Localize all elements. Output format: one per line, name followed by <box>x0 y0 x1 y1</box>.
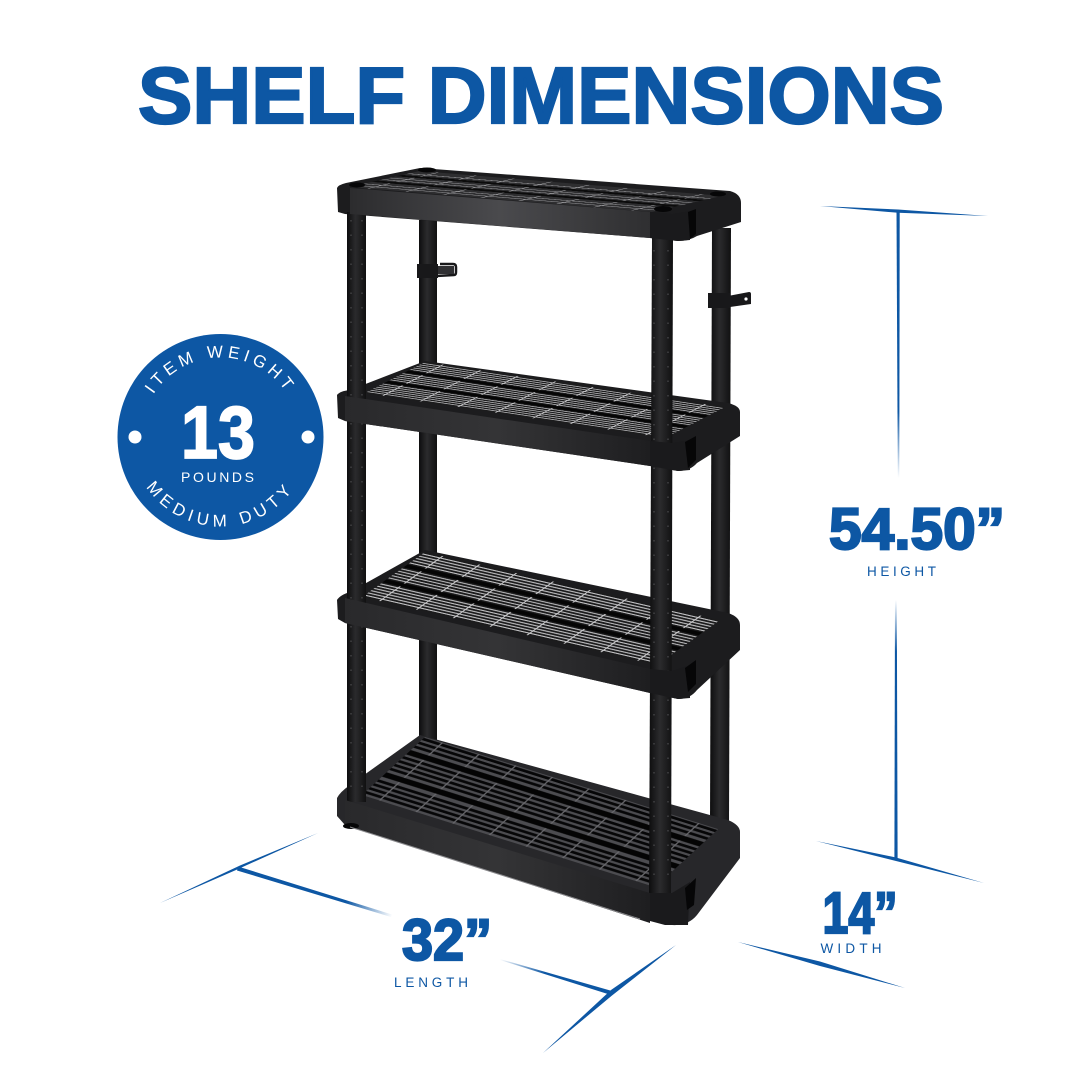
shelf 3 front face <box>345 598 650 693</box>
width value: 14” <box>822 881 898 946</box>
shelf 4 front face <box>345 800 650 923</box>
height dimension line <box>816 206 988 883</box>
title: SHELF DIMENSIONS <box>138 51 944 140</box>
shelf 2 body <box>337 361 740 471</box>
length dimension lines <box>160 833 676 1053</box>
shelf 3 body <box>337 550 740 699</box>
rear posts <box>419 220 731 825</box>
badge curved bottom text: MEDIUM DUTY <box>146 480 289 527</box>
shelf corner pieces <box>650 211 690 925</box>
shelf 2 front face <box>345 396 650 466</box>
width dimension line <box>738 942 905 988</box>
badge dots <box>128 430 314 444</box>
rear left hanging clip <box>417 264 456 278</box>
shelf corner notches and fixing holes <box>343 168 726 910</box>
rear right hanging clip <box>708 292 751 308</box>
shelf 1 body <box>337 168 741 241</box>
shelf 3 grid surface <box>362 552 720 665</box>
height value: HEIGHT <box>867 564 936 579</box>
length value: 32” <box>402 908 492 973</box>
length value: LENGTH <box>394 975 468 990</box>
highlight on bottom shelf edge <box>350 827 640 919</box>
shelf 1 top surface <box>350 171 722 212</box>
front posts <box>347 212 673 894</box>
height value: 54.50” <box>829 497 1005 562</box>
badge number: 13 <box>181 391 255 474</box>
shelf 4 body <box>337 735 740 925</box>
shelf 2 grid surface <box>365 362 725 438</box>
badge curved top text: ITEM WEIGHT <box>144 346 294 394</box>
badge unit: POUNDS <box>181 469 254 485</box>
width value <box>820 881 898 956</box>
shelf unit product illustration <box>337 168 751 925</box>
shelf 4 grid surface <box>362 737 718 887</box>
weight badge <box>118 334 324 540</box>
shelf 1 front face <box>350 188 650 238</box>
width value: WIDTH <box>820 941 882 956</box>
